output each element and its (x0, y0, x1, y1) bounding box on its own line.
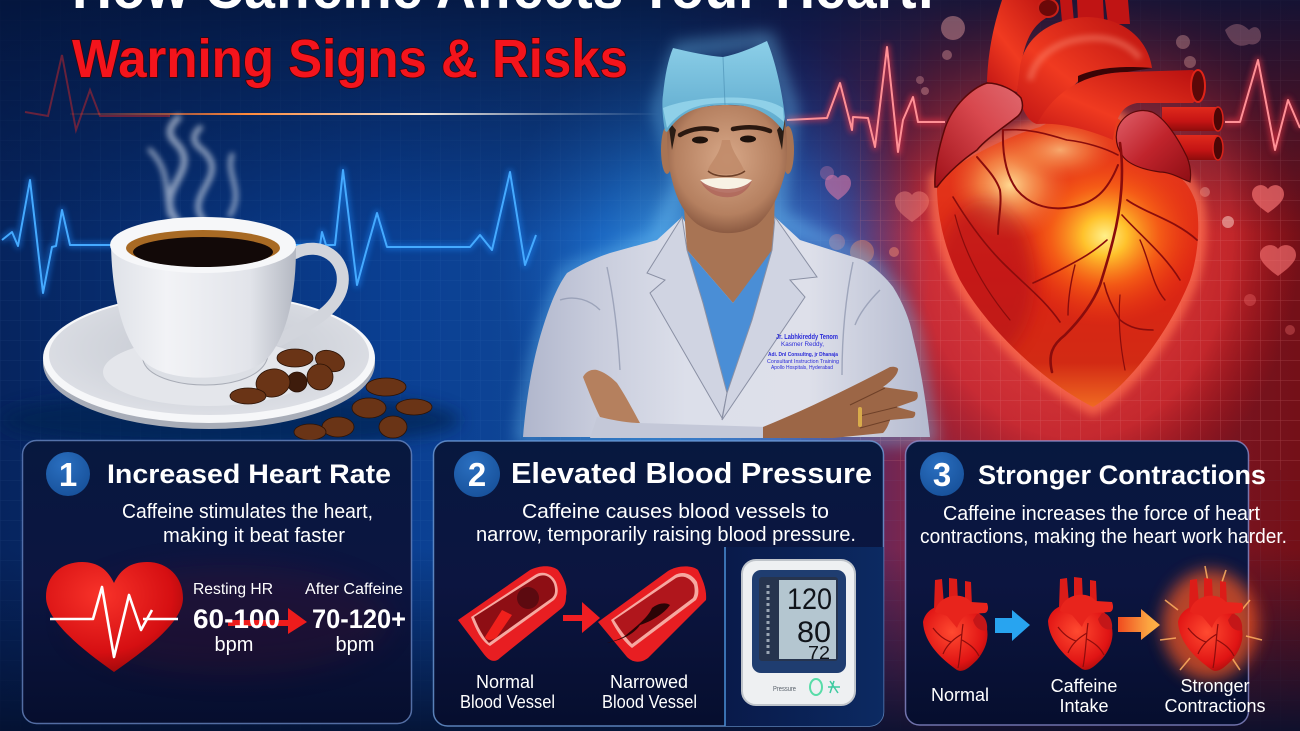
ECG line: red right (787, 47, 1300, 152)
after caffeine stat: 70-120+ (312, 604, 406, 634)
illustration: narrowed blood vessel (598, 566, 706, 662)
ears (661, 126, 673, 174)
label: stronger contractions (1164, 676, 1266, 716)
scrubs (687, 250, 772, 393)
coffee (133, 237, 273, 267)
label: stronger contractions: Stronger (1180, 676, 1250, 696)
label: normal: Normal (931, 685, 989, 705)
coffee crema (126, 230, 280, 266)
crossed arms: sleeve band (590, 417, 767, 438)
panel 1: increased heart rate (22, 440, 412, 724)
doctor portrait (523, 40, 930, 438)
blood pressure monitor (742, 560, 855, 705)
coat name embroidery: Consultant Instruction Training (767, 359, 839, 365)
icon: red heart with pulse (46, 562, 183, 672)
illustration: normal blood vessel (458, 566, 567, 661)
after caffeine stat: After Caffeine (305, 581, 403, 598)
illustration: anatomical heart (935, 0, 1223, 407)
ECG line: blue left (2, 170, 536, 293)
coat (523, 217, 930, 437)
label: narrowed blood vessel: Blood Vessel (602, 692, 697, 712)
blood pressure monitor: Pressure (773, 686, 796, 693)
label: caffeine intake (1051, 676, 1117, 716)
description: contractions, making the heart work harder. (920, 526, 1287, 548)
monitor readings: 80 (797, 616, 831, 649)
coat name embroidery: Kasmer Reddy, (781, 341, 824, 348)
resting heart rate stat: bpm (215, 634, 253, 656)
title line 2: Warning Signs & Risks (72, 29, 628, 89)
coat name embroidery: Apollo Hospitals, Hyderabad (771, 365, 833, 371)
resting heart rate stat: 60-100 (193, 604, 280, 634)
label: caffeine intake: Caffeine (1051, 676, 1117, 696)
aorta arch (1017, 17, 1152, 124)
surgical cap (662, 41, 785, 132)
cup foot (143, 356, 268, 385)
coat arm seams (560, 262, 880, 375)
heading: Stronger Contractions (978, 460, 1266, 490)
back vessel (987, 0, 1058, 92)
arrow: narrowing (563, 602, 600, 633)
decorative bokeh hearts (820, 16, 1296, 335)
hair at temples (668, 120, 785, 150)
label: narrowed blood vessel: Narrowed (610, 672, 688, 692)
coronary vessels (953, 130, 1197, 372)
right atrium (1116, 111, 1191, 182)
eyebrows (680, 127, 770, 135)
soft ground shadow (0, 392, 460, 448)
description: Caffeine stimulates the heart, (122, 501, 373, 523)
description (476, 501, 856, 546)
heading: Elevated Blood Pressure (511, 458, 872, 490)
panel 2: elevated blood pressure (434, 441, 884, 726)
panel background (434, 441, 884, 726)
description: making it beat faster (163, 525, 345, 547)
heart body (935, 112, 1205, 407)
crossed arms: left hand (583, 370, 640, 423)
upper right pipes (1162, 107, 1218, 131)
number badge 1 (46, 452, 90, 496)
number badge 2: 2 (468, 456, 486, 493)
number badge 3: 3 (933, 456, 951, 493)
resting heart rate stat (193, 581, 280, 656)
arrow: blue (995, 610, 1030, 641)
title (72, 0, 935, 89)
icon: steaming coffee cup on saucer with beans (0, 118, 460, 448)
ring (858, 407, 862, 427)
arrow between heart rates (228, 608, 307, 634)
coat name embroidery (767, 334, 839, 371)
top branch vessels (1060, 0, 1130, 24)
number badge 2 (454, 451, 500, 497)
panel divider (724, 547, 726, 726)
monitor readings: 120 (787, 583, 832, 616)
eyes (692, 136, 708, 144)
right lapel (722, 217, 817, 420)
icon: caffeine intake heart (1048, 577, 1113, 670)
steam (150, 118, 236, 222)
icon: normal heart (923, 578, 988, 671)
coat name embroidery: Jr. Labhkireddy Tenom (776, 334, 838, 341)
heading: Increased Heart Rate (107, 459, 391, 489)
coffee beans on saucer and table (230, 346, 432, 440)
pulmonary trunk pipe (1037, 70, 1199, 140)
icon: stronger contractions heart with glow (1160, 566, 1262, 680)
ECG line: faint red upper left (25, 55, 170, 130)
cup body (111, 245, 296, 378)
aorta highlight (1030, 38, 1140, 80)
face (667, 105, 787, 233)
description: Caffeine increases the force of heart (943, 503, 1260, 525)
label: stronger contractions: Contractions (1164, 696, 1266, 716)
saucer (43, 297, 375, 429)
panel background (906, 441, 1248, 725)
crossed arms: right forearm and hand (763, 367, 918, 438)
after caffeine stat: bpm (336, 634, 374, 656)
description: Caffeine causes blood vessels to (522, 501, 829, 523)
title divider line (70, 113, 660, 115)
number badge 1: 1 (59, 456, 77, 493)
monitor column background (725, 547, 884, 726)
label: caffeine intake: Intake (1059, 696, 1109, 716)
smile (700, 178, 752, 193)
monitor logo and indicators (810, 679, 822, 695)
resting heart rate stat: Resting HR (193, 581, 273, 598)
finger lines (850, 388, 897, 428)
description (122, 501, 373, 547)
left lapel (647, 217, 727, 418)
coat name embroidery: Adi. Dnl Consultng, jr Dhanaja (768, 352, 839, 358)
description (920, 503, 1287, 548)
shadow under arch (1078, 67, 1152, 84)
panel background (22, 440, 412, 724)
heart halo (937, 112, 1198, 407)
number badge 3 (920, 452, 964, 496)
panel 3: stronger contractions (906, 441, 1287, 725)
cup handle (280, 249, 343, 340)
label: normal blood vessel: Normal (476, 672, 534, 692)
monitor readings (787, 583, 832, 663)
description: narrow, temporarily raising blood pressure. (476, 524, 856, 546)
neck (683, 195, 775, 303)
left atrium (935, 83, 1022, 187)
label: narrowed blood vessel (602, 672, 697, 712)
nose (708, 140, 744, 174)
after caffeine stat (305, 581, 406, 656)
monitor readings: 72 (808, 643, 830, 663)
label: normal blood vessel (460, 672, 555, 712)
arrow: orange (1118, 609, 1160, 640)
rim glow (523, 40, 930, 437)
label: normal blood vessel: Blood Vessel (460, 692, 555, 712)
